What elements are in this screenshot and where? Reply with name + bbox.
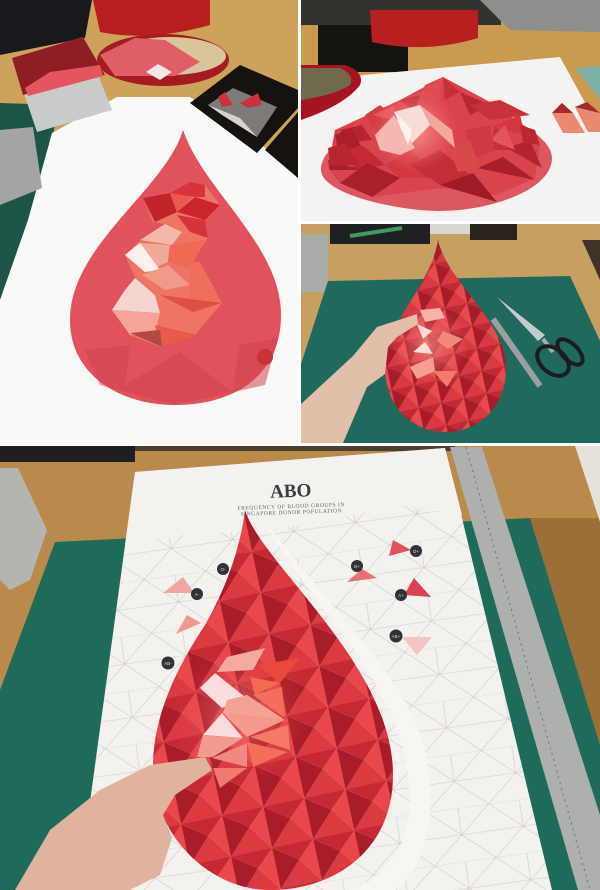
folded strips (552, 102, 600, 133)
chart triangles with blood group markers: AB- (164, 661, 172, 666)
scissors (497, 297, 587, 382)
black box (318, 25, 408, 72)
chart triangles with blood group markers: O+ (413, 549, 419, 554)
panel: bottom photo, ABO poster with drop (0, 446, 600, 890)
chart triangles with blood group markers: AB+ (392, 634, 401, 639)
subtitle: SINGAPORE DONOR POPULATION (241, 508, 342, 518)
panel: middle-right photo, hand holding drop (301, 224, 600, 443)
chart triangles with blood group markers (162, 540, 432, 670)
metal tin (0, 468, 47, 590)
chart triangles with blood group markers: A+ (398, 593, 404, 598)
red tin (370, 10, 478, 47)
panel: top-left photo of flat drop with boxes (0, 0, 298, 443)
metal tin (301, 234, 328, 292)
stain on drop (257, 349, 273, 365)
hand holding drop (15, 757, 212, 890)
white poster (301, 57, 600, 221)
grey tin lid (0, 127, 42, 205)
subtitle (238, 502, 345, 518)
poster title: ABO (270, 480, 312, 503)
craft knife (493, 319, 540, 386)
white poster sheet (0, 97, 298, 443)
lid tray with paper pieces (97, 34, 229, 86)
poster header area (125, 448, 462, 545)
red round tin (93, 0, 210, 36)
origami pyramids cluster (112, 182, 222, 347)
steel ruler (450, 447, 600, 890)
subtitle: FREQUENCY OF BLOOD GROUPS IN (238, 502, 345, 512)
green pen (350, 228, 402, 236)
panel: top-right photo, low-angle view (301, 0, 600, 221)
red tray (301, 65, 361, 120)
flat red drop (70, 130, 281, 405)
pyramids in perspective (328, 77, 542, 202)
white sheet at right edge (575, 446, 600, 522)
green mat (301, 276, 600, 443)
green cutting mat (0, 103, 60, 300)
black boxes (190, 65, 298, 178)
white poster (78, 448, 552, 890)
chart triangles with blood group markers: B+ (354, 564, 360, 569)
chart triangles with blood group markers: O- (220, 567, 226, 572)
chart triangles with blood group markers: A- (195, 592, 200, 597)
dark cloth (0, 0, 92, 55)
shaded wood at right (530, 518, 600, 745)
folded drop (385, 239, 506, 432)
metal tin with red pieces (12, 37, 112, 132)
teal mat (575, 66, 600, 100)
large folded origami drop (153, 510, 393, 890)
blurred dark background (301, 0, 501, 25)
faint star facets on drop (85, 338, 278, 405)
pale folded pieces (197, 648, 300, 788)
triangular mesh (78, 505, 558, 890)
green cutting mat (0, 518, 600, 890)
blank drop outline band beside drop (262, 515, 431, 890)
hand and forearm (301, 314, 418, 443)
poster title (237, 479, 345, 518)
pink drop base (321, 77, 552, 211)
